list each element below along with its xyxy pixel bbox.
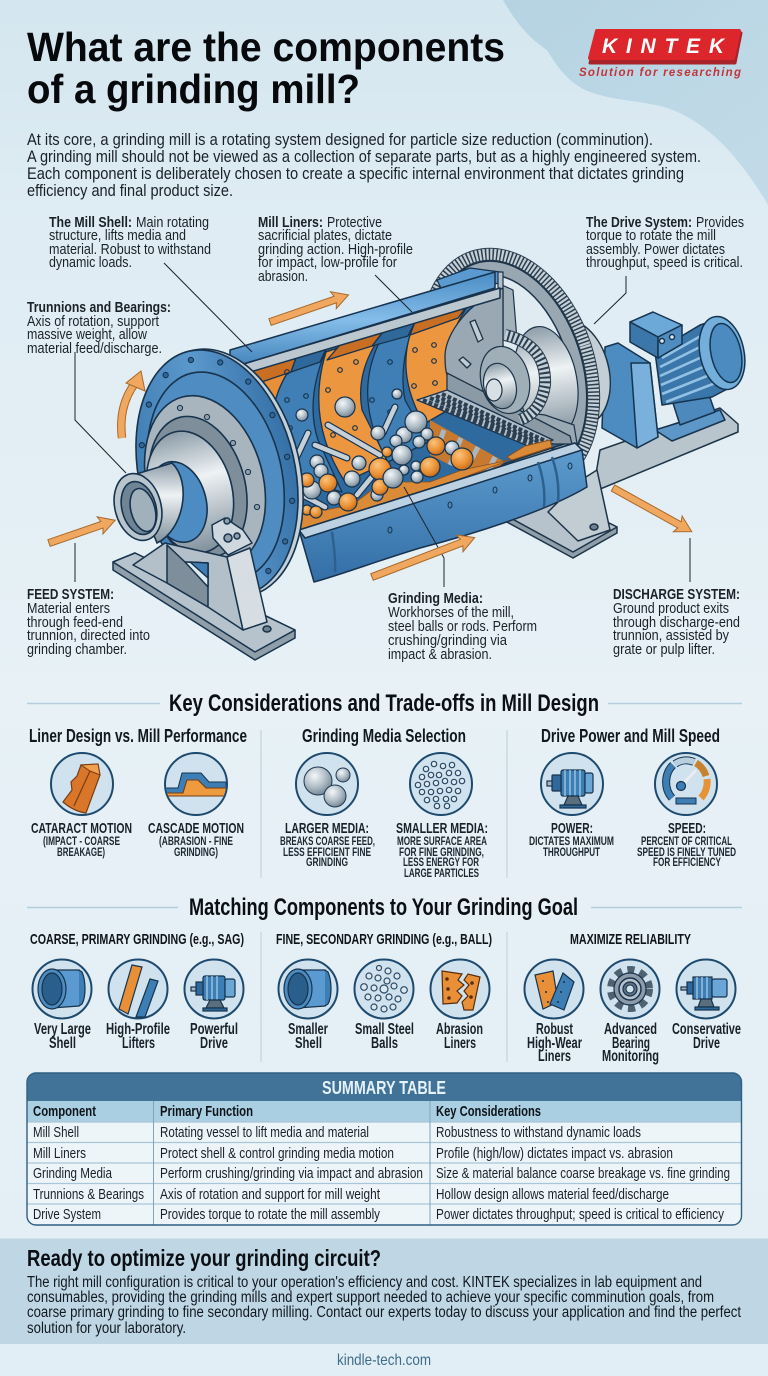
- arrow: shell rotation curved: [121, 371, 145, 438]
- label: small steel balls: [355, 1021, 414, 1052]
- corner background shape: [503, 0, 768, 205]
- caption: cascade motion: (ABRASION - FINE: [159, 834, 233, 848]
- label: feed system: trunnion, directed into: [27, 627, 150, 644]
- liner bolts: [284, 342, 438, 438]
- label: mill shell: [49, 214, 211, 271]
- label: robust liners: High-Wear: [527, 1035, 582, 1052]
- row: mill liners: Profile (high/low) dictates impact vs. abrasion: [436, 1145, 673, 1162]
- arrow: feed direction: [46, 512, 118, 552]
- caption: speed: [637, 820, 736, 869]
- icon: smaller shell: [278, 960, 338, 1018]
- row: mill shell: [33, 1124, 641, 1141]
- label: drive system: Provides: [696, 214, 744, 231]
- label: mill liners: Protective: [327, 214, 382, 231]
- footer call to action: Ready to optimize your grinding circuit?: [27, 1245, 381, 1271]
- label: robust liners: [527, 1021, 582, 1065]
- table title bar: [27, 1073, 742, 1101]
- lower shell: [299, 443, 587, 582]
- upper shell bar: [230, 272, 500, 378]
- icon: powerful drive: [184, 960, 244, 1018]
- icon: high-profile lifters: [108, 960, 168, 1018]
- label: discharge system: trunnion, assisted by: [613, 627, 729, 644]
- intro text: Each component is deliberately chosen to create a specific internal environment that dictates grinding: [27, 165, 684, 183]
- label: mill liners: [258, 214, 413, 285]
- panel: coarse primary grinding: [30, 931, 244, 1052]
- table header row: Primary Function: [160, 1103, 253, 1120]
- row: drive system: Provides torque to rotate the mill assembly: [160, 1206, 380, 1223]
- label: small steel balls: Small Steel: [355, 1021, 414, 1038]
- motor support rail: [593, 408, 738, 492]
- label: very large shell: Very Large: [34, 1021, 91, 1038]
- label: grinding media: Workhorses of the mill,: [388, 604, 514, 621]
- label: robust liners: Liners: [538, 1048, 571, 1065]
- label: conservative drive: [672, 1021, 741, 1052]
- label: feed system: through feed-end: [27, 614, 123, 631]
- label: trunnions and bearings: massive weight, allow: [27, 326, 147, 343]
- shell back arc: [437, 268, 500, 292]
- row: trunnions and bearings: [33, 1186, 669, 1203]
- icon: large balls: [296, 753, 358, 815]
- caption: cataract motion: BREAKAGE): [57, 845, 105, 859]
- arrow: top of shell: [267, 286, 351, 331]
- table title bar: SUMMARY TABLE: [322, 1078, 446, 1098]
- row: grinding media: Perform crushing/grinding via impact and abrasion: [160, 1165, 423, 1182]
- logo: KINTEK: Solution for researching: [579, 67, 741, 79]
- divider: [261, 730, 507, 878]
- panel: grinding media selection: [280, 726, 488, 880]
- panel: liner design: [29, 726, 247, 859]
- grinding rods: [292, 407, 395, 507]
- caption: smaller media: LARGE PARTICLES: [404, 866, 479, 880]
- table header row: [27, 1101, 742, 1122]
- caption: cataract motion: CATARACT MOTION: [31, 820, 132, 837]
- summary table: [27, 1073, 742, 1225]
- label: high-profile lifters: [106, 1021, 170, 1052]
- row: mill shell: Mill Shell: [33, 1124, 79, 1141]
- label: feed system: FEED SYSTEM:: [27, 586, 114, 603]
- label: mill shell: The Mill Shell:: [49, 214, 132, 231]
- ore bed: [296, 460, 510, 535]
- caption: speed: FOR EFFICIENCY: [653, 855, 721, 869]
- label: smaller shell: [288, 1021, 328, 1052]
- title: What are the components: [27, 24, 505, 70]
- row: mill liners: Mill Liners: [33, 1145, 86, 1162]
- intro text: [27, 131, 701, 200]
- label: bearing monitoring: Monitoring: [602, 1048, 659, 1065]
- label: grinding media: Grinding Media:: [388, 590, 483, 607]
- caption: smaller media: LESS ENERGY FOR: [403, 855, 479, 869]
- label: powerful drive: Powerful: [190, 1021, 238, 1038]
- label: drive system: torque to rotate the mill: [586, 227, 716, 244]
- arrow: lower shell: [369, 529, 478, 585]
- subheading: media selection: Grinding Media Selection: [302, 726, 466, 746]
- label: drive system: The Drive System:: [586, 214, 692, 231]
- label: small steel balls: Balls: [371, 1035, 398, 1052]
- footer call to action: solution for your laboratory.: [27, 1320, 186, 1337]
- label: grinding media: crushing/grinding via: [388, 632, 508, 649]
- label: mill liners: grinding action. High-profile: [258, 241, 413, 258]
- label: mill liners: Mill Liners:: [258, 214, 323, 231]
- intro text: efficiency and final product size.: [27, 182, 233, 200]
- interior cutaway with liners: [254, 288, 572, 528]
- caption: smaller media: [396, 820, 488, 880]
- row: grinding media: [33, 1165, 730, 1182]
- row: trunnions and bearings: Trunnions & Bearings: [33, 1186, 144, 1203]
- subheading: reliability: MAXIMIZE RELIABILITY: [570, 931, 691, 948]
- liner bands: [254, 308, 466, 493]
- label: conservative drive: Conservative: [672, 1021, 741, 1038]
- label: conservative drive: Drive: [693, 1035, 720, 1052]
- icon: cataract liner: [51, 753, 113, 815]
- label: feed system: grinding chamber.: [27, 641, 127, 658]
- label: abrasion liners: [436, 1021, 483, 1052]
- icon: very large shell: [32, 960, 92, 1018]
- icon: speed gauge: [655, 753, 717, 815]
- panel: maximize reliability: [524, 931, 741, 1065]
- label: discharge system: Ground product exits: [613, 600, 729, 617]
- label: trunnions and bearings: Trunnions and Bearings:: [27, 299, 171, 316]
- label: very large shell: Shell: [49, 1035, 76, 1052]
- caption: cataract motion: (IMPACT - COARSE: [43, 834, 120, 848]
- row: grinding media: Grinding Media: [33, 1165, 113, 1182]
- label: drive system: [586, 214, 744, 271]
- flange bolts: [118, 341, 316, 605]
- label: drive system: throughput, speed is critical.: [586, 254, 743, 271]
- caption: larger media: [280, 820, 375, 869]
- caption: power: [529, 820, 614, 859]
- icon: conservative drive: [676, 960, 736, 1018]
- mill illustration: [107, 232, 751, 660]
- caption: cascade motion: [148, 820, 244, 859]
- icon: bearing gear: [600, 960, 660, 1018]
- large girth gear: [398, 232, 622, 508]
- gray end disc: [445, 288, 572, 444]
- panel: fine secondary grinding: [276, 931, 492, 1052]
- feed-end flange: [113, 333, 326, 614]
- caption: power: THROUGHPUT: [543, 845, 600, 859]
- label: discharge system: [613, 586, 740, 658]
- subheading: liner design: Liner Design vs. Mill Performance: [29, 726, 247, 746]
- label: trunnions and bearings: material feed/discharge.: [27, 340, 162, 357]
- caption: smaller media: FOR FINE GRINDING,: [399, 845, 484, 859]
- label: mill shell: structure, lifts media and: [49, 227, 186, 244]
- table header row: Component: [33, 1103, 96, 1120]
- label: discharge system: through discharge-end: [613, 614, 740, 631]
- label: robust liners: Robust: [536, 1021, 573, 1038]
- label: high-profile lifters: High-Profile: [106, 1021, 170, 1038]
- label: high-profile lifters: Lifters: [122, 1035, 155, 1052]
- logo: KINTEK: [579, 31, 741, 79]
- steel hub and lower ring plate: [498, 272, 586, 450]
- leader lines: [75, 263, 690, 587]
- drive motor: [602, 312, 751, 448]
- row: mill liners: Protect shell & control grinding media motion: [160, 1145, 394, 1162]
- label: trunnions and bearings: Axis of rotation, support: [27, 313, 160, 330]
- caption: larger media: LARGER MEDIA:: [285, 820, 369, 837]
- intro text: At its core, a grinding mill is a rotating system designed for particle size reduction (comminution).: [27, 131, 653, 149]
- label: drive system: assembly. Power dictates: [586, 241, 725, 258]
- section heading: matching components: Matching Components to Your Grinding Goal: [189, 894, 578, 921]
- label: grinding media: steel balls or rods. Perform: [388, 618, 537, 635]
- label: mill shell: material. Robust to withstand: [49, 241, 211, 258]
- label: smaller shell: Shell: [295, 1035, 322, 1052]
- row: trunnions and bearings: Hollow design allows material feed/discharge: [436, 1186, 669, 1203]
- right pedestal: [505, 470, 617, 558]
- left pedestal: [113, 518, 295, 660]
- label: mill liners: for impact, low-profile for: [258, 254, 397, 271]
- icon: abrasion liners: [430, 960, 490, 1018]
- caption: speed: SPEED:: [668, 820, 706, 837]
- label: smaller shell: Smaller: [288, 1021, 328, 1038]
- label: mill liners: abrasion.: [258, 268, 308, 285]
- label: bearing monitoring: [602, 1021, 659, 1065]
- discharge grate: [417, 390, 553, 480]
- label: grinding media: [388, 590, 537, 663]
- section heading: key considerations: Key Considerations and Trade-offs in Mill Design: [169, 690, 599, 717]
- trunnion: [107, 463, 183, 546]
- label: abrasion liners: Liners: [444, 1035, 476, 1052]
- label: feed system: [27, 586, 150, 658]
- label: mill liners: sacrificial plates, dictate: [258, 227, 392, 244]
- label: trunnions and bearings: [27, 299, 171, 357]
- icon: cascade liner: [165, 753, 227, 815]
- label: bearing monitoring: Advanced: [604, 1021, 657, 1038]
- caption: smaller media: MORE SURFACE AREA: [397, 834, 487, 848]
- website url: kindle-tech.com: [337, 1352, 431, 1369]
- caption: cascade motion: CASCADE MOTION: [148, 820, 244, 837]
- caption: larger media: GRINDING: [306, 855, 348, 869]
- footer call to action: [0, 1238, 768, 1344]
- label: powerful drive: Drive: [200, 1035, 228, 1052]
- label: discharge system: grate or pulp lifter.: [613, 641, 715, 658]
- pinion and shaft hub: [473, 335, 545, 420]
- title: [27, 24, 505, 112]
- label: grinding media: impact & abrasion.: [388, 646, 492, 663]
- label: mill shell: Main rotating: [136, 214, 209, 231]
- label: very large shell: [34, 1021, 91, 1052]
- icon: small steel balls: [354, 960, 414, 1018]
- row: drive system: [33, 1206, 724, 1223]
- caption: larger media: LESS EFFICIENT FINE: [283, 845, 371, 859]
- label: feed system: Material enters: [27, 600, 110, 617]
- icon: motor power: [541, 753, 603, 815]
- table header row: Key Considerations: [436, 1103, 541, 1120]
- row: mill liners: [33, 1145, 673, 1162]
- label: abrasion liners: Abrasion: [436, 1021, 483, 1038]
- row: drive system: Drive System: [33, 1206, 101, 1223]
- divider: [261, 932, 507, 1062]
- subheading: fine: FINE, SECONDARY GRINDING (e.g., BALL): [276, 931, 492, 948]
- caption: cataract motion: [31, 820, 132, 859]
- label: bearing monitoring: Bearing: [612, 1035, 650, 1052]
- row: mill shell: Rotating vessel to lift media and material: [160, 1124, 369, 1141]
- row: mill shell: Robustness to withstand dynamic loads: [436, 1124, 641, 1141]
- hub behind gear: [523, 311, 621, 435]
- label: powerful drive: [190, 1021, 238, 1052]
- caption: power: POWER:: [551, 820, 593, 837]
- panel: drive power and speed: [529, 726, 736, 869]
- logo: KINTEK: KINTEK: [602, 35, 726, 58]
- caption: power: DICTATES MAXIMUM: [529, 834, 614, 848]
- title: of a grinding mill?: [27, 66, 360, 112]
- caption: cascade motion: GRINDING): [174, 845, 218, 859]
- arrow: discharge: [609, 480, 696, 540]
- grinding balls: [271, 389, 473, 518]
- caption: larger media: BREAKS COARSE FEED,: [280, 834, 375, 848]
- row: trunnions and bearings: Axis of rotation and support for mill weight: [160, 1186, 381, 1203]
- icon: small balls: [410, 753, 472, 815]
- label: mill shell: dynamic loads.: [49, 254, 132, 271]
- icon: robust liners: [524, 960, 584, 1018]
- caption: smaller media: SMALLER MEDIA:: [396, 820, 488, 837]
- subheading: coarse: COARSE, PRIMARY GRINDING (e.g., SAG): [30, 931, 244, 948]
